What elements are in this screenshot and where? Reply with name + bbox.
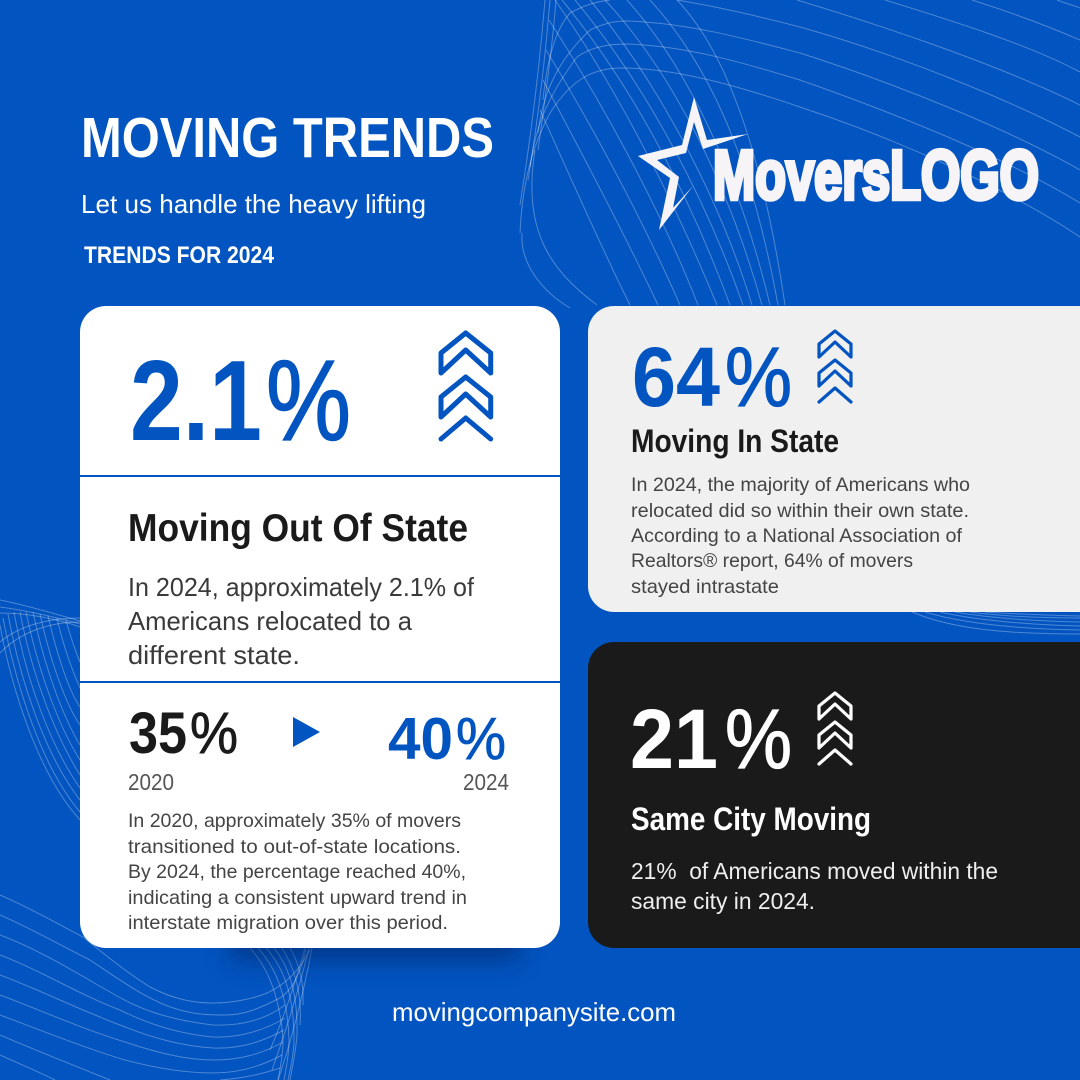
icon: up chevrons bbox=[441, 333, 491, 439]
text block: trend description: In 2020, approximately 35% of movers bbox=[128, 810, 461, 832]
stat: 64%: 64 bbox=[632, 330, 720, 424]
text block: trend description bbox=[128, 810, 467, 934]
text block: 21% description: 21% of Americans moved within the bbox=[631, 858, 998, 884]
stat: 35% in 2020: 35 bbox=[129, 701, 187, 766]
subtitle: Let us handle the heavy lifting bbox=[81, 189, 426, 219]
text block: 2.1% description: different state. bbox=[128, 640, 300, 670]
text block: 64% description: Realtors® report, 64% of movers bbox=[631, 550, 913, 572]
stat: 2.1%: % bbox=[266, 338, 351, 465]
stat: 40% in 2024 bbox=[388, 706, 509, 795]
heading: moving in state: Moving In State bbox=[631, 423, 839, 459]
footer: website: movingcompanysite.com bbox=[392, 997, 676, 1027]
text block: trend description: By 2024, the percentage reached 40%, bbox=[128, 861, 466, 883]
text block: 64% description: In 2024, the majority of Americans who bbox=[631, 474, 970, 496]
text block: trend description: transitioned to out-of-state locations. bbox=[128, 836, 461, 858]
stat: 21%: 21 bbox=[630, 692, 718, 786]
stat: 40% in 2024: 40 bbox=[388, 706, 453, 772]
stat: 40% in 2024: 2024 bbox=[463, 769, 509, 795]
text block: 64% description: According to a National Association of bbox=[631, 525, 963, 547]
text block: 21% description bbox=[631, 858, 998, 914]
text block: 64% description: stayed intrastate bbox=[631, 576, 779, 598]
logo: MoversLOGO bbox=[638, 97, 1039, 230]
section label: trends for 2024: TRENDS FOR 2024 bbox=[84, 242, 275, 269]
stat: 35% in 2020 bbox=[128, 701, 238, 795]
icon: up chevrons bbox=[819, 693, 851, 764]
heading: moving out of state: Moving Out Of State bbox=[128, 507, 468, 550]
text block: 64% description: relocated did so within their own state. bbox=[631, 500, 969, 522]
stat: 2.1%: 2.1 bbox=[130, 338, 262, 465]
title: MOVING TRENDS bbox=[81, 106, 494, 170]
stat: 40% in 2024: % bbox=[456, 706, 506, 772]
panel: moving out of state bbox=[80, 306, 560, 948]
text block: 64% description bbox=[631, 474, 970, 598]
stat: 64%: % bbox=[725, 330, 792, 424]
stat: 21% bbox=[630, 692, 792, 786]
panel: moving in state bbox=[588, 306, 1080, 612]
text block: 2.1% description bbox=[128, 572, 475, 670]
icon: up chevrons bbox=[819, 331, 851, 402]
panel: same city moving bbox=[588, 642, 1080, 948]
text block: 21% description: same city in 2024. bbox=[631, 888, 815, 914]
stat: 64% bbox=[632, 330, 792, 424]
stat: 35% in 2020: % bbox=[190, 701, 238, 766]
text block: 2.1% description: In 2024, approximately 2.1% of bbox=[128, 572, 475, 602]
heading: same city moving: Same City Moving bbox=[631, 801, 871, 837]
arrow bbox=[293, 717, 320, 747]
card shadow bbox=[230, 925, 520, 959]
text block: trend description: interstate migration over this period. bbox=[128, 912, 448, 934]
text block: trend description: indicating a consistent upward trend in bbox=[128, 887, 467, 909]
text block: 2.1% description: Americans relocated to a bbox=[128, 606, 413, 636]
stat: 35% in 2020: 2020 bbox=[128, 769, 174, 795]
icon: logo star bbox=[638, 97, 748, 230]
stat: 21%: % bbox=[725, 692, 792, 786]
